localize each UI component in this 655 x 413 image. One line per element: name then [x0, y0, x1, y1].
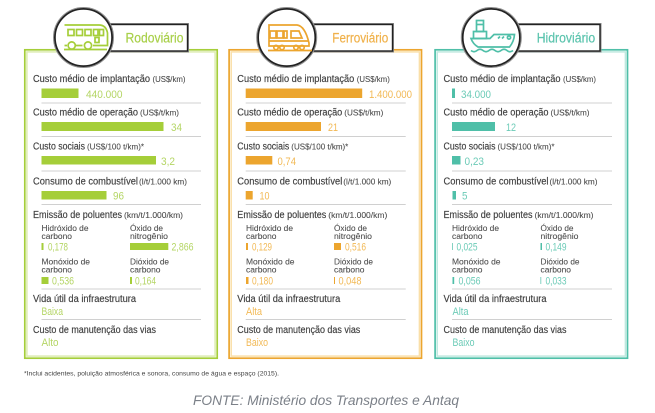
source caption: FONTE: Ministério dos Transportes e Antaq	[193, 392, 459, 408]
row: emissão de poluentes: 0,149	[546, 242, 566, 254]
row: consumo de combustível	[444, 176, 612, 204]
row: emissão de poluentes: Hidróxido de	[246, 223, 293, 233]
row: emissão de poluentes: Dióxido de	[540, 256, 580, 266]
row: emissão de poluentes: carbono	[130, 264, 161, 274]
row: custo de operação: Custo médio de operação	[444, 108, 549, 118]
row: consumo de combustível: (l/t/1.000 km)	[343, 178, 392, 186]
row: custo de implantação: (US$/km)	[152, 75, 186, 84]
row: custo de implantação	[444, 74, 612, 103]
row: vida útil da infraestrutura: Vida útil da infraestrutura	[444, 294, 547, 305]
row: custos sociais: 0,23	[464, 156, 484, 168]
row: emissão de poluentes: 0,516	[345, 242, 366, 254]
row: custo de operação: Custo médio de operação	[237, 108, 343, 118]
row: custo de operação: (US$/t/km)	[344, 108, 384, 118]
icon: train	[257, 8, 317, 68]
row: emissão de poluentes: nitrogênio	[540, 231, 579, 241]
row: custos sociais: Custo sociais	[444, 142, 496, 152]
panel frame	[435, 50, 628, 358]
heading label: Hidroviário: Hidroviário	[537, 30, 595, 46]
panel: Rodoviário	[25, 8, 217, 358]
row: emissão de poluentes: 2,866	[172, 242, 194, 254]
row: emissão de poluentes: carbono	[452, 231, 483, 241]
row: custos sociais: (US$/100 t/km)*	[498, 142, 554, 152]
row: emissão de poluentes: Monóxido de	[452, 256, 501, 266]
panel: Hidroviário	[435, 8, 628, 358]
row: custo de implantação: (US$/km)	[357, 75, 390, 84]
row: consumo de combustível: Consumo de combustível	[444, 176, 548, 188]
row: emissão de poluentes: nitrogênio	[334, 231, 372, 241]
row: emissão de poluentes: carbono	[246, 231, 277, 241]
row: custo de operação: 12	[506, 122, 516, 134]
row: emissão de poluentes: Emissão de poluentes	[237, 210, 326, 221]
icon: bus	[54, 8, 114, 68]
row: custo de manutenção	[33, 325, 156, 349]
row: vida útil da infraestrutura: Baixa	[42, 306, 64, 318]
row: custo de manutenção: Baixo	[246, 337, 268, 349]
row: custos sociais	[444, 142, 612, 171]
row: emissão de poluentes: 0,178	[48, 242, 68, 254]
panel: Ferroviário	[229, 8, 422, 358]
row: emissão de poluentes: 0,164	[135, 276, 156, 288]
row: emissão de poluentes: 0,048	[338, 276, 362, 288]
row: consumo de combustível	[237, 176, 406, 204]
row: custo de implantação: Custo médio de implantação	[237, 74, 355, 85]
row: custo de implantação	[237, 74, 412, 103]
row: emissão de poluentes: Monóxido de	[42, 256, 90, 266]
row: emissão de poluentes: 0,025	[456, 242, 478, 254]
row: consumo de combustível: (l/t/1.000 km)	[139, 178, 187, 186]
row: custos sociais: 3,2	[161, 156, 175, 168]
row: emissão de poluentes: carbono	[452, 264, 483, 274]
row: vida útil da infraestrutura	[237, 294, 406, 320]
row: custos sociais: (US$/100 t/km)*	[87, 142, 144, 152]
row: vida útil da infraestrutura	[33, 294, 201, 320]
row: consumo de combustível: Consumo de combustível	[33, 176, 138, 188]
row: emissão de poluentes: Emissão de poluentes	[444, 210, 533, 221]
row: custo de implantação	[33, 74, 201, 103]
row: emissão de poluentes: nitrogênio	[130, 231, 168, 241]
row: emissão de poluentes: carbono	[42, 231, 72, 241]
row: custo de implantação: Custo médio de implantação	[33, 74, 151, 85]
row: vida útil da infraestrutura	[444, 294, 612, 320]
row: emissão de poluentes: Óxido de	[130, 223, 163, 233]
row: consumo de combustível: Consumo de combustível	[237, 176, 342, 188]
heading label: Rodoviário: Rodoviário	[126, 30, 184, 46]
row: custo de implantação: 440.000	[86, 89, 122, 101]
row: consumo de combustível: (l/t/1.000 km)	[550, 178, 598, 186]
row: vida útil da infraestrutura: Alta	[246, 306, 263, 318]
row: emissão de poluentes: Dióxido de	[334, 256, 373, 266]
row: emissão de poluentes: carbono	[246, 264, 277, 274]
row: emissão de poluentes	[33, 210, 201, 289]
row: emissão de poluentes: 0,033	[546, 276, 566, 288]
row: custo de manutenção: Custo de manutenção das vias	[33, 325, 156, 336]
panel frame	[229, 50, 422, 358]
row: emissão de poluentes: (km/t/1.000/km)	[124, 211, 183, 220]
row: custo de manutenção	[237, 325, 360, 349]
row: custos sociais: Custo sociais	[33, 142, 85, 152]
row: custos sociais: (US$/100 t/km)*	[291, 142, 348, 152]
row: emissão de poluentes: (km/t/1.000/km)	[534, 211, 594, 220]
heading label: Ferroviário: Ferroviário	[332, 30, 388, 46]
row: vida útil da infraestrutura: Alta	[452, 306, 469, 318]
row: custo de operação	[33, 108, 201, 136]
row: emissão de poluentes: (km/t/1.000/km)	[328, 211, 388, 220]
row: custo de operação: Custo médio de operação	[33, 108, 139, 118]
row: custo de manutenção: Custo de manutenção das vias	[237, 325, 360, 336]
row: consumo de combustível	[33, 176, 201, 204]
panel frame	[25, 50, 217, 358]
row: custo de operação: 21	[328, 122, 338, 134]
row: custo de manutenção: Alto	[42, 337, 58, 349]
row: emissão de poluentes: Emissão de poluentes	[33, 210, 122, 221]
row: custos sociais: Custo sociais	[237, 142, 289, 152]
row: vida útil da infraestrutura: Vida útil da infraestrutura	[237, 294, 341, 305]
row: consumo de combustível: 5	[462, 190, 468, 202]
heading label: Rodoviário	[108, 24, 188, 52]
row: custo de implantação: Custo médio de implantação	[444, 74, 561, 85]
row: custo de manutenção: Custo de manutenção das vias	[444, 325, 567, 336]
row: emissão de poluentes: Monóxido de	[246, 256, 295, 266]
row: emissão de poluentes: 0,180	[252, 276, 273, 288]
row: custos sociais	[237, 142, 406, 171]
footnote: *Inclui acidentes, poluição atmosférica e sonora, consumo de água e espaço (2015).	[24, 370, 279, 378]
heading label: Ferroviário	[311, 24, 394, 52]
row: custo de operação: 34	[171, 122, 182, 134]
row: consumo de combustível: 96	[113, 190, 124, 202]
row: custos sociais	[33, 142, 201, 171]
row: custo de manutenção: Baixo	[452, 337, 474, 349]
heading label: Hidroviário	[516, 24, 601, 52]
row: custo de operação: (US$/t/km)	[140, 108, 179, 118]
icon: ship	[461, 8, 521, 68]
row: custo de operação: (US$/t/km)	[550, 108, 590, 118]
row: emissão de poluentes: carbono	[540, 264, 571, 274]
row: emissão de poluentes: 0,129	[252, 242, 272, 254]
row: custo de implantação: (US$/km)	[563, 75, 596, 84]
row: emissão de poluentes: 0,536	[52, 276, 74, 288]
row: custos sociais: 0,74	[278, 156, 296, 168]
row: emissão de poluentes: carbono	[334, 264, 365, 274]
row: emissão de poluentes	[237, 210, 406, 289]
row: custo de implantação: 1.400.000	[369, 89, 412, 101]
row: emissão de poluentes: Dióxido de	[130, 256, 169, 266]
row: emissão de poluentes: Hidróxido de	[452, 223, 499, 233]
row: emissão de poluentes: Hidróxido de	[42, 223, 89, 233]
row: emissão de poluentes: 0,056	[458, 276, 480, 288]
row: custo de operação	[444, 108, 612, 136]
row: vida útil da infraestrutura: Vida útil da infraestrutura	[33, 294, 137, 305]
row: custo de implantação: 34.000	[461, 89, 491, 101]
row: emissão de poluentes: carbono	[42, 264, 72, 274]
row: emissão de poluentes	[444, 210, 612, 289]
row: emissão de poluentes: Óxido de	[334, 223, 367, 233]
row: custo de manutenção	[444, 325, 567, 349]
row: emissão de poluentes: Óxido de	[540, 223, 574, 233]
row: custo de operação	[237, 108, 406, 136]
row: consumo de combustível: 10	[260, 190, 270, 202]
